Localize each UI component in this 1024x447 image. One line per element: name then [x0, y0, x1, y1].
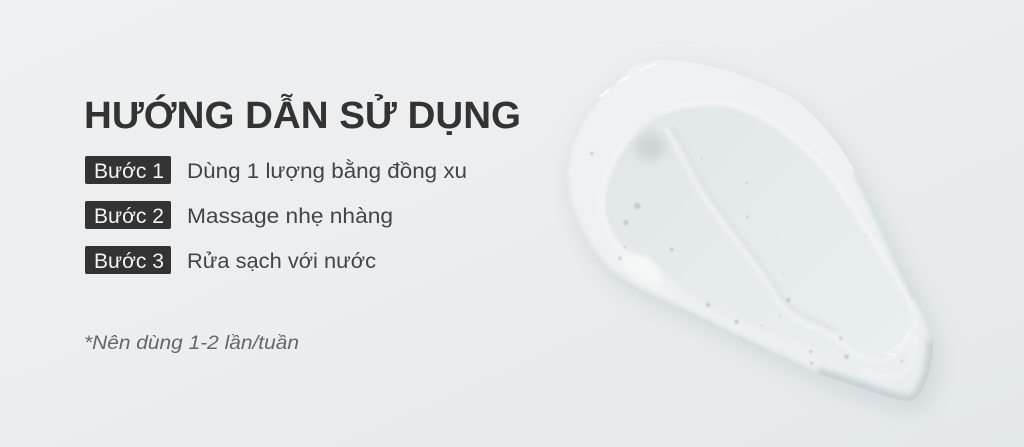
gel bright patch: [620, 255, 663, 288]
gel tip highlight: [860, 335, 916, 376]
step 2 text: Massage nhẹ nhàng: [187, 205, 393, 228]
footnote: *Nên dùng 1-2 lần/tuần: [84, 333, 299, 354]
badge: Bước 1: [85, 156, 171, 184]
gel left edge tint: [565, 72, 623, 268]
gel inner bright rim: [603, 102, 915, 362]
badge: Bước 2: Bước 2: [94, 205, 164, 228]
gel right edge shading: [857, 170, 933, 340]
step 1 text: Dùng 1 lượng bằng đồng xu: [187, 160, 467, 183]
gel bottom tip shading: [817, 340, 933, 402]
gel inner pool: [604, 105, 912, 368]
badge: Bước 1: Bước 1: [94, 160, 164, 183]
title: HƯỚNG DẪN SỬ DỤNG: [84, 93, 521, 137]
gel bubbles: [590, 152, 903, 365]
gel dark hollow: [635, 133, 665, 160]
gel lower lobe: [650, 267, 843, 367]
step 3: [85, 246, 376, 274]
step 2: [85, 201, 393, 229]
gel rim shading: [565, 72, 933, 402]
gel ridge highlight: [665, 128, 883, 362]
gel outer body: [565, 59, 933, 402]
step 1: [85, 156, 467, 184]
badge: Bước 3: Bước 3: [94, 250, 164, 273]
gel lower edge shading: [610, 270, 817, 373]
gel specular highlights: [599, 63, 908, 355]
badge: Bước 3: [85, 246, 171, 274]
badge: Bước 2: [85, 201, 171, 229]
gel ridge shade: [672, 127, 837, 331]
step 3 text: Rửa sạch với nước: [187, 250, 376, 273]
gel swatch image: [565, 59, 939, 412]
gel drop shadow: [571, 69, 939, 412]
